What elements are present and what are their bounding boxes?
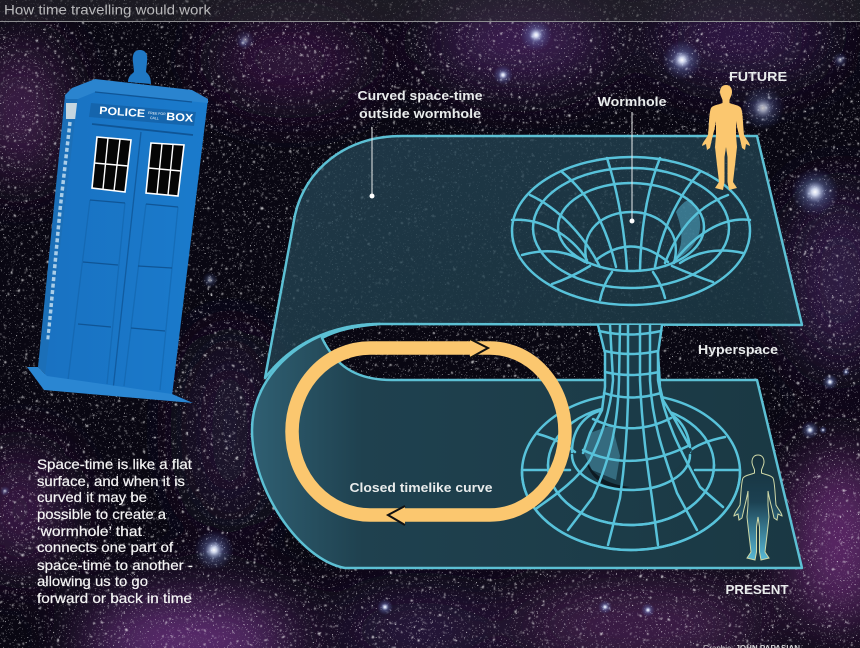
wormhole mouth: present, back rings <box>522 394 740 550</box>
label: wormhole <box>598 95 667 224</box>
explanatory text block <box>37 456 193 606</box>
arrow: back <box>388 506 405 525</box>
sign panel: FREE FOR <box>148 111 166 116</box>
explanatory text block: Space-time is like a flat <box>37 456 192 472</box>
explanatory text block: forward or back in time <box>37 590 192 606</box>
label: closed timelike curve: Closed timelike curve <box>350 481 493 495</box>
closed timelike curve loop <box>292 339 565 525</box>
sign panel: BOX <box>166 111 194 125</box>
arrow: forward <box>470 339 488 358</box>
explanatory text block: ‘wormhole’ that <box>37 523 142 539</box>
left window <box>92 137 131 192</box>
finial lamp <box>128 50 151 84</box>
front face <box>45 88 208 396</box>
throat highlight <box>584 425 620 480</box>
label: curved space-time: Curved space-time <box>358 89 483 103</box>
label: present: PRESENT <box>726 583 789 597</box>
explanatory text block: possible to create a <box>37 506 166 522</box>
figure: present person <box>734 455 782 560</box>
explanatory text block: connects one part of <box>37 539 173 555</box>
side face <box>38 93 80 376</box>
title bar: How time travelling would work <box>4 2 211 18</box>
figure: future person <box>702 85 750 190</box>
explanatory text block: curved it may be <box>37 489 147 505</box>
roof <box>65 79 208 103</box>
throat grid <box>522 325 740 550</box>
sign panel: POLICE <box>99 105 146 120</box>
sign panel <box>89 103 196 126</box>
label: curved space-time: outside wormhole <box>359 107 481 121</box>
throat fill <box>582 325 692 489</box>
TARDIS police box <box>27 50 208 403</box>
explanatory text block: surface, and when it is <box>37 473 185 489</box>
upper sheet (future) <box>265 136 802 378</box>
label: hyperspace: Hyperspace <box>698 343 778 357</box>
side lamp sign <box>66 103 77 119</box>
title bar <box>0 0 860 22</box>
explanatory text block: space-time to another - <box>37 557 193 573</box>
base <box>27 367 193 403</box>
explanatory text block: allowing us to go <box>37 573 148 589</box>
label: curved space-time <box>358 89 483 198</box>
right window <box>146 143 184 196</box>
throat highlight <box>672 200 700 262</box>
door lines and panels <box>68 92 193 390</box>
diagram: folded space-time sheets <box>252 136 802 568</box>
side detail <box>48 122 70 340</box>
wormhole throat <box>522 325 740 550</box>
throat shadow <box>586 460 630 488</box>
sign panel: CALL <box>150 116 159 121</box>
lower sheet (present) with fold <box>252 324 802 568</box>
wormhole mouth: future <box>512 157 750 305</box>
label: future: FUTURE <box>729 70 787 84</box>
label: wormhole: Wormhole <box>598 95 667 109</box>
